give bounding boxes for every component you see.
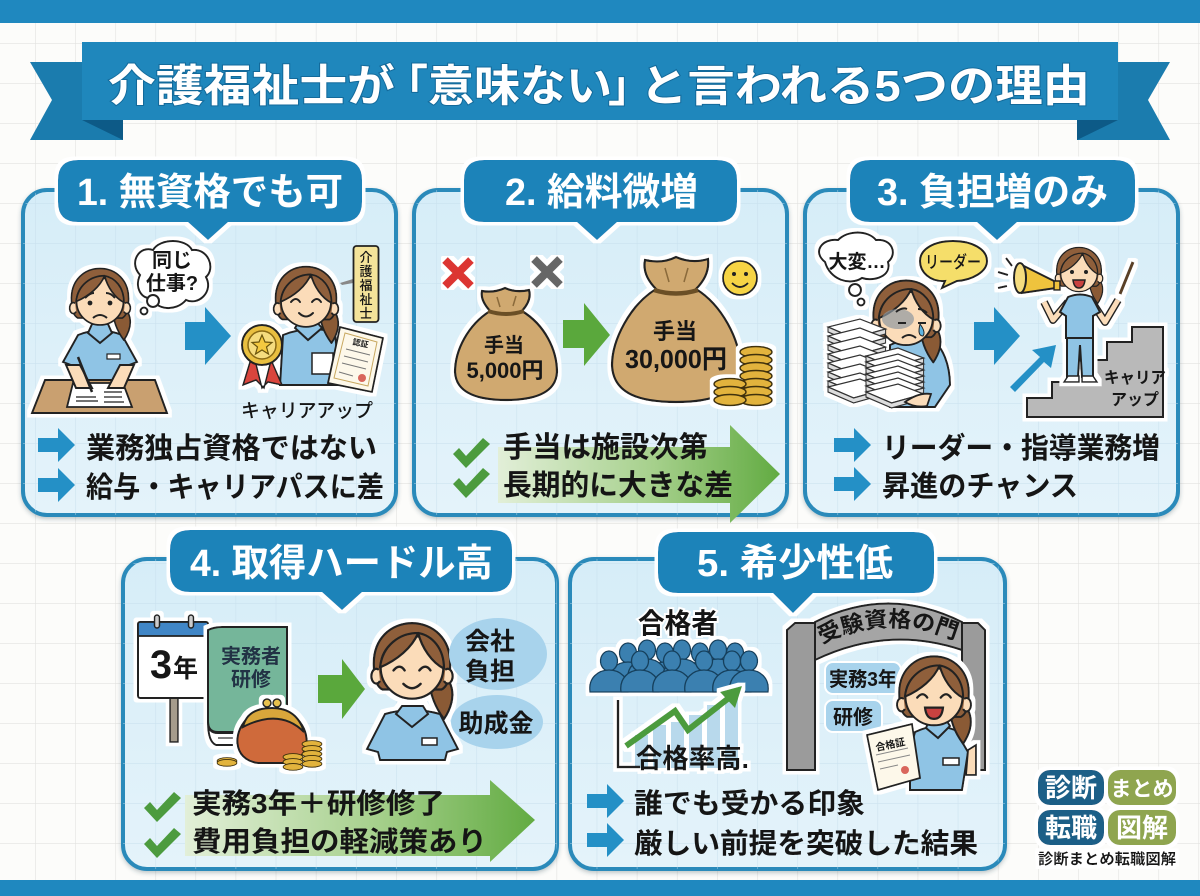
coins: [714, 346, 772, 406]
logo block: 図解: [1116, 813, 1168, 843]
panel 4: 取得ハードル高: [123, 530, 557, 869]
bullet list: リーダー・指導業務増: [882, 431, 1160, 465]
small money bag: 手当: [484, 334, 524, 357]
top bar: [0, 0, 1200, 23]
bullet list: 厳しい前提を突破した結果: [634, 828, 978, 859]
green arrow: [563, 303, 610, 366]
illustration: leader with megaphone: [998, 247, 1133, 382]
badge: 研修: [825, 700, 882, 732]
heading: [170, 530, 512, 610]
icon: gray x: [534, 259, 560, 285]
logo block: 診断: [1045, 773, 1097, 803]
large money bag: [612, 257, 740, 402]
arrow: [974, 307, 1020, 365]
badge: 実務3年: 実務3年: [829, 668, 897, 691]
title text: 「: [384, 62, 428, 111]
arrow: [185, 307, 231, 365]
heading: [58, 160, 362, 240]
qualification sign: 士: [359, 306, 373, 321]
panel 5: 希少性低: [566, 528, 1010, 876]
thought bubble: 同じ: [152, 250, 192, 272]
title text: [108, 62, 1090, 111]
heading: [464, 160, 737, 240]
qualification sign: 護: [359, 264, 373, 279]
heading: 5. 希少性低: [697, 543, 893, 585]
illustration: worker with certificate: 合格証: [874, 735, 906, 754]
bullet list: 長期的に大きな差: [503, 469, 733, 502]
stairs: [1027, 327, 1166, 417]
illustration: textbook: 実務者: [221, 645, 281, 668]
title text: と言われる5つの理由: [640, 62, 1090, 111]
bullet list: 誰でも受かる印象: [634, 788, 865, 819]
heading: [658, 532, 934, 613]
diagonal arrow: [1010, 345, 1056, 392]
bullet list: 手当は施設次第: [503, 431, 708, 464]
bullet list: 費用負担の軽減策あり: [192, 826, 487, 857]
stairs: アップ: [1111, 391, 1159, 409]
large money bag: 手当: [653, 319, 697, 344]
illustration: calendar: 3: [150, 643, 172, 687]
illustration: coin purse: [217, 699, 322, 770]
bottom bar: [0, 880, 1200, 896]
chart: pass rate rising: [618, 686, 749, 774]
logo block: まとめ: [1110, 778, 1174, 801]
badge: 会社負担: [449, 618, 547, 690]
logo block: 診断まとめ転職図解: [1038, 850, 1176, 868]
badge: 会社負担: 会社: [465, 628, 515, 656]
caption: キャリアアップ: [241, 400, 373, 422]
illustration: worried worker at desk: [32, 268, 167, 413]
badge: 実務3年: [825, 662, 901, 694]
illustration: calendar: [138, 615, 208, 742]
thought bubble: [819, 232, 893, 306]
badge: 助成金: [451, 695, 543, 749]
illustration: textbook: 研修: [231, 668, 271, 691]
stairs: キャリア: [1104, 370, 1166, 387]
illustration: tired worker with papers: [828, 280, 950, 408]
qualification sign: 福: [359, 278, 373, 293]
logo block: 転職: [1045, 813, 1097, 843]
illustration: exam gate: 受験資格の門: [816, 608, 960, 644]
bullet list: [144, 788, 487, 858]
bullet list: 業務独占資格ではない: [86, 432, 377, 465]
thought bubble: [135, 241, 210, 314]
bullet list: 実務3年＋研修修了: [192, 788, 445, 819]
title text: 意味ない: [428, 62, 612, 111]
icon: smiley: [723, 261, 757, 295]
title banner: [30, 42, 1170, 140]
title text: 」: [608, 62, 652, 111]
badge: 研修: 研修: [833, 706, 873, 729]
panel 1: 無資格でも可: [23, 160, 396, 515]
illustration: worker with certificate: [867, 656, 976, 790]
thought bubble: 仕事?: [146, 272, 198, 295]
illustration: textbook: [208, 627, 287, 745]
heading: 3. 負担増のみ: [877, 172, 1108, 214]
illustration: calendar: 年: [173, 655, 198, 683]
speech bubble: リーダー: リーダー: [925, 252, 981, 272]
small money bag: 5,000円: [466, 358, 544, 383]
qualification sign: [340, 246, 378, 322]
gradient arrow: [498, 425, 780, 523]
bullet list: 昇進のチャンス: [882, 470, 1078, 503]
bullet list: [38, 428, 384, 504]
logo block: [1038, 770, 1176, 868]
panel 2: 給料微増: [414, 160, 787, 523]
illustration: smiling worker: [367, 623, 458, 760]
badge: 助成金: 助成金: [458, 710, 534, 738]
qualification sign: 介: [359, 250, 373, 265]
bullet list: 給与・キャリアパスに差: [86, 471, 384, 504]
green arrow: [318, 659, 365, 719]
heading: 1. 無資格でも可: [77, 172, 343, 214]
bullet list: [834, 428, 1160, 503]
heading: [850, 160, 1135, 240]
large money bag: 30,000円: [625, 344, 727, 374]
title text: 介護福祉士が: [108, 62, 395, 111]
qualification sign: 祉: [359, 292, 373, 307]
thought bubble: 大変…: [828, 251, 886, 273]
panel 3: 負担増のみ: [805, 160, 1178, 515]
gradient arrow: [185, 780, 535, 862]
illustration: qualified worker with medal and certificate: [242, 267, 383, 392]
chart: pass rate rising: 合格率高.: [636, 744, 749, 774]
speech bubble: リーダー: [920, 241, 987, 288]
label: 合格者: 合格者: [638, 608, 718, 639]
heading: 2. 給料微増: [505, 172, 698, 214]
heading: 4. 取得ハードル高: [190, 543, 493, 585]
small money bag: [455, 288, 557, 400]
bullet list: [587, 784, 978, 859]
bullet list: [453, 431, 733, 502]
badge: 会社負担: 負担: [465, 658, 515, 686]
crowd of passers: [590, 640, 768, 692]
illustration: qualified worker with medal and certificate: 認証: [352, 337, 369, 350]
icon: red x: [445, 260, 471, 286]
illustration: exam gate: [782, 599, 990, 774]
